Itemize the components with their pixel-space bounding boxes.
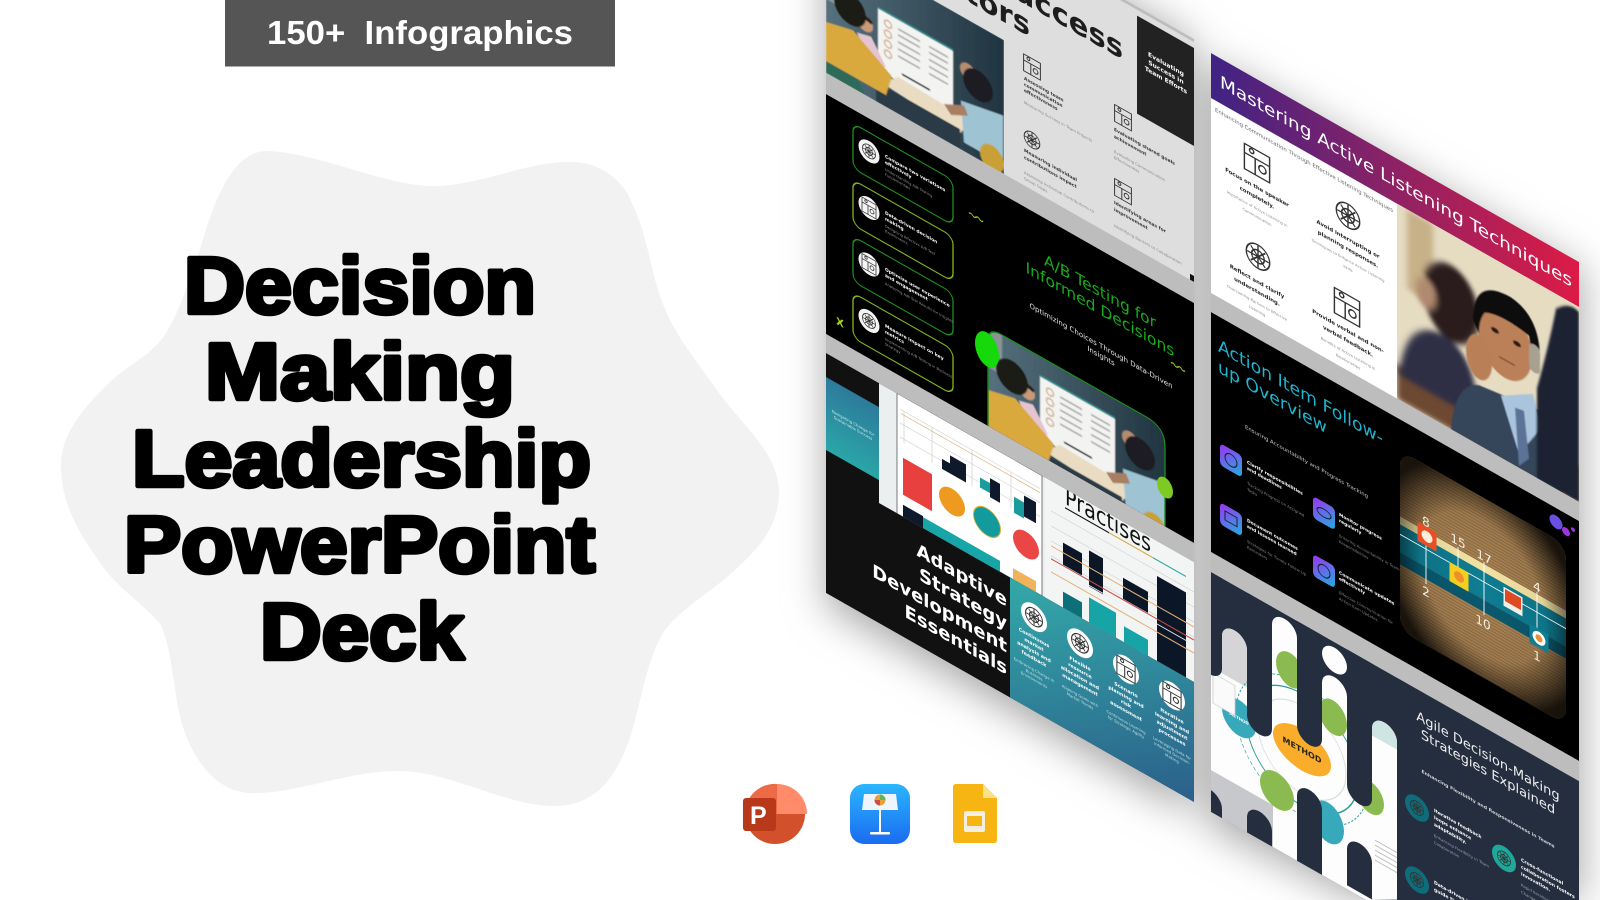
slide: agile decision-making xyxy=(1197,514,1579,900)
action item 4: Effective Communication for xyxy=(1339,590,1393,625)
step 3 xyxy=(1106,654,1146,739)
action item 3 xyxy=(1313,496,1400,578)
panel: evaluating success: Success in xyxy=(1148,59,1184,86)
step 1: analysis and xyxy=(1017,640,1051,665)
item: focus on the speaker: Importance of Active Listening in xyxy=(1227,189,1288,229)
panel: evaluating success: Evaluating xyxy=(1148,50,1184,78)
strategy 3 xyxy=(1405,861,1492,900)
subtitle: Insights xyxy=(1087,344,1115,368)
timeline image: 15 xyxy=(1450,531,1466,553)
action item 2 xyxy=(1220,502,1306,583)
step 2: Market Trends xyxy=(1067,691,1093,711)
list card 2: making xyxy=(885,216,904,233)
slide: A/B testing xyxy=(826,94,1194,562)
step 4 xyxy=(1154,680,1191,764)
title: Making xyxy=(205,327,515,416)
strategy 1: adaptability. xyxy=(1434,822,1467,846)
action item 4: Communicate updates xyxy=(1339,570,1395,607)
item: focus on the speaker: Communication xyxy=(1242,206,1272,228)
item: measuring individual contributions xyxy=(1024,130,1094,213)
method diagram in pill mask: METHOD xyxy=(1283,735,1321,767)
timeline image: 8 xyxy=(1422,514,1430,532)
step 1: feedback xyxy=(1022,649,1047,669)
practise bars xyxy=(1063,542,1186,678)
step 4: processes xyxy=(1159,727,1185,748)
title: Leadership xyxy=(132,414,591,503)
photo: team meeting xyxy=(826,0,1004,178)
list card 2: Designing Effective A/B Test xyxy=(885,223,936,257)
action item 4 xyxy=(1313,554,1395,632)
item: measuring individual contributions: Assessing Individual Contributions to xyxy=(1024,170,1094,214)
item: assessing team communication xyxy=(1024,54,1092,143)
item: identifying areas for improvement: improvement xyxy=(1114,207,1148,232)
action item 3: Responsibilities xyxy=(1339,539,1368,560)
step 3: assessment xyxy=(1110,700,1142,724)
heading: Action Item Follow- xyxy=(1218,336,1383,449)
list card 2: Experiments xyxy=(885,228,908,246)
timeline image: 1 xyxy=(1533,648,1541,666)
item: avoid interrupting: Skills xyxy=(1343,263,1353,273)
list card 1: Compare two variations xyxy=(885,154,945,194)
bottom bars xyxy=(903,505,923,528)
icon: PowerPoint xyxy=(743,784,807,844)
organic blob behind title xyxy=(61,151,779,806)
heading band: Mastering Active Listening Techniques xyxy=(1220,72,1572,292)
title: PowerPoint xyxy=(124,500,595,589)
item: assessing team communication: effectiveness xyxy=(1024,88,1058,112)
gray gutters between slides xyxy=(826,0,1579,900)
item: provide verbal xyxy=(1312,275,1384,384)
badge: 150+ Infographics xyxy=(225,0,615,66)
strategy 1: Enhancing Flexibility in Team xyxy=(1434,833,1489,869)
subtitle: Enhancing Flexibility and Responsiveness in Teams xyxy=(1422,769,1555,850)
list card 3 xyxy=(853,236,953,338)
item: evaluating shared goals xyxy=(1114,104,1175,182)
method diagram in pill mask: METHOD xyxy=(1229,711,1249,728)
list card 2: Data-driven decision xyxy=(885,210,938,246)
step 2: Flexible xyxy=(1069,656,1091,673)
step 3: for Strategic Agility xyxy=(1108,714,1145,740)
subtitle: Optimizing Choices Through Data-Driven xyxy=(1029,301,1173,391)
step 1: Continuous xyxy=(1019,627,1049,650)
practises heading: Practises xyxy=(1065,482,1151,559)
item: reflect and clarify: Reflect and clarify xyxy=(1230,264,1284,301)
subtitle: Enhancing Communication Through Effective Listening Techniques xyxy=(1215,108,1393,214)
slide: action item follow-up xyxy=(1211,312,1579,761)
action item 2: Strategies for Timely Follow-Up xyxy=(1247,539,1306,577)
list card 2 xyxy=(853,180,953,282)
action item 4: effectively xyxy=(1339,576,1365,596)
list card 3: Optimize user experience xyxy=(885,267,950,309)
strategy 1: loops enhance xyxy=(1434,815,1472,842)
item: evaluating shared goals: Effectiveness xyxy=(1114,155,1139,174)
step 3: Continuous Learning xyxy=(1106,709,1146,736)
list card 4: metrics xyxy=(885,329,904,346)
strategy 2: collaboration fosters xyxy=(1521,864,1575,900)
step 2: Aligning Goals with xyxy=(1062,683,1099,709)
icon: PowerPoint: P xyxy=(750,802,767,830)
accent ellipse lime xyxy=(1157,476,1173,498)
panel: evaluating success: Team Efforts xyxy=(1145,65,1187,96)
strategy 1: Collaboration xyxy=(1434,840,1460,859)
step 1: market xyxy=(1024,637,1044,654)
decorative purple dots xyxy=(1550,512,1575,541)
step 3: Scenario xyxy=(1114,681,1138,700)
icon: Google Slides xyxy=(953,784,997,843)
action item 2: Document outcomes xyxy=(1247,518,1298,552)
step 3: planning and xyxy=(1108,685,1144,710)
shadow behind slide columns xyxy=(826,0,1582,900)
item: measuring individual contributions: Group Goals xyxy=(1024,176,1047,194)
item: provide verbal: Benefits of Active Listening in xyxy=(1321,336,1376,372)
accent ellipse green xyxy=(975,331,999,368)
step 4: Informed Decision- xyxy=(1154,741,1190,766)
strategy 1 xyxy=(1405,789,1489,876)
item: assessing team communication: Measuring Success in Team Projects xyxy=(1024,100,1092,143)
item: evaluating shared goals: Evaluating shared goals xyxy=(1114,127,1175,167)
timeline image: 2 xyxy=(1422,584,1430,602)
action item 4: Action Item Updates xyxy=(1339,596,1378,623)
item: evaluating shared goals: achievement xyxy=(1114,134,1147,158)
item: evaluating shared goals: Evaluating Communication xyxy=(1114,149,1165,183)
side panel: teal label: Sustainable Success xyxy=(834,415,872,441)
item: reflect and clarify: Listening xyxy=(1249,304,1266,318)
method diagram in pill mask xyxy=(1211,572,1397,900)
list card 4: Implementing A/B Testing in Business xyxy=(885,336,952,379)
list card 4: Measure impact on key xyxy=(885,323,944,363)
step 4: adjustment xyxy=(1157,719,1188,742)
item: identifying areas for improvement: Identifying Barriers to Collaboration xyxy=(1114,223,1182,266)
timeline image: 4 xyxy=(1533,579,1541,597)
item: focus on the speaker: completely. xyxy=(1240,186,1274,211)
item: avoid interrupting: Techniques to Enhance Active Listening xyxy=(1311,237,1385,284)
list card 1: effectively xyxy=(885,160,912,181)
timeline image xyxy=(1400,450,1566,725)
item: measuring individual contributions: contributions impact xyxy=(1024,155,1077,191)
list card 1: Fundamentals xyxy=(885,172,910,191)
heading: adaptive strategy development essentials: Development xyxy=(872,560,1007,657)
badge: 150+ Infographics: 150+ Infographics xyxy=(267,14,573,51)
heading: adaptive strategy development essentials: Adaptive xyxy=(917,539,1007,611)
step 1: Business xyxy=(1026,668,1042,682)
step 1: Environments xyxy=(1021,670,1047,689)
item: identifying areas for improvement xyxy=(1114,178,1182,266)
action item 2: and lessons learned xyxy=(1247,524,1297,558)
strategy 2: Cross-functional xyxy=(1521,857,1563,887)
action item 1: and deadlines xyxy=(1247,466,1282,491)
heading: Informed Decisions xyxy=(1026,258,1174,361)
title xyxy=(124,241,595,676)
red square xyxy=(903,458,932,511)
action item 3: Ensuring Accountability in Team xyxy=(1339,533,1400,572)
step 4: learning and xyxy=(1155,711,1189,736)
step 2: resource xyxy=(1068,662,1092,681)
subtitle: Ensuring Accountability and Progress Tracking xyxy=(1245,425,1368,500)
item: reflect and clarify: Overcoming Barriers to Effective xyxy=(1227,283,1288,322)
side panel: teal label: Navigating Change for xyxy=(832,409,875,438)
chart images xyxy=(879,377,1194,682)
step 4: Leveraging Data for xyxy=(1153,735,1191,761)
dark bars xyxy=(942,455,966,482)
lime squiggles xyxy=(969,212,1185,372)
side panel: teal label xyxy=(826,377,879,480)
panel: teal four steps xyxy=(1010,578,1194,802)
panel: evaluating success xyxy=(1137,16,1194,146)
action item 2: Reminders xyxy=(1247,545,1267,561)
item: provide verbal: Provide verbal and non- xyxy=(1312,309,1384,355)
step 4: Iterative xyxy=(1160,707,1184,726)
list card 4: Strategy xyxy=(885,341,901,355)
item: provide verbal: verbal feedback. xyxy=(1323,325,1373,359)
item: focus on the speaker: Focus on the speaker xyxy=(1225,167,1289,209)
photo: man listening xyxy=(1397,204,1579,502)
action item 1: Tracking Progress on Assigned xyxy=(1246,480,1305,518)
item: assessing team communication: communication xyxy=(1024,82,1063,110)
strategy 1: Iterative feedback xyxy=(1434,808,1482,841)
step 2: management xyxy=(1062,672,1098,698)
item: provide verbal: Relationships xyxy=(1336,352,1360,371)
heading: adaptive strategy development essentials: Essentials xyxy=(905,600,1007,679)
list card 3: Analyzing A/B Test Results for Insights xyxy=(885,281,953,324)
step 2: allocation and xyxy=(1061,665,1099,692)
heading: A/B Testing for xyxy=(1044,250,1156,332)
list card 1: Understanding A/B Testing xyxy=(885,167,933,199)
heading: adaptive strategy development essentials: Strategy xyxy=(919,563,1007,635)
timeline image: 17 xyxy=(1476,547,1492,569)
photo: team meeting, rounded xyxy=(988,332,1165,526)
slide: adaptive strategy xyxy=(826,347,1194,802)
icon: Keynote xyxy=(850,784,910,844)
step 1 xyxy=(1014,602,1054,688)
item: reflect and clarify xyxy=(1227,227,1288,330)
item: identifying areas for improvement: Identifying areas for xyxy=(1114,200,1166,235)
action item 1: Tasks xyxy=(1246,486,1257,497)
item: avoid interrupting: Avoid interrupting or xyxy=(1317,219,1380,261)
practise underline xyxy=(1065,508,1186,576)
action item 3: regularly xyxy=(1339,518,1361,536)
step 4: Making xyxy=(1165,752,1179,765)
action item 1 xyxy=(1220,443,1305,524)
circles xyxy=(939,486,965,516)
item: focus on the speaker xyxy=(1226,142,1289,227)
step 1: Embracing Change in xyxy=(1014,656,1055,684)
timeline image: 10 xyxy=(1475,612,1491,635)
action item 3: Monitor progress xyxy=(1339,512,1382,542)
heading: up Overview xyxy=(1218,357,1327,438)
item: avoid interrupting: planning responses. xyxy=(1318,230,1378,270)
item: avoid interrupting xyxy=(1312,202,1384,283)
action item 1: Clarify responsibilities xyxy=(1247,460,1303,497)
lime x mark: X xyxy=(836,314,844,331)
item: measuring individual contributions: Measuring individual xyxy=(1024,148,1077,184)
heading: Agile Decision-Making xyxy=(1416,709,1560,805)
list card 1 xyxy=(853,123,953,225)
step 3: risk xyxy=(1121,699,1132,710)
strategy 2 xyxy=(1492,840,1575,900)
slide: mastering active listening xyxy=(1211,53,1579,502)
list card 4 xyxy=(853,293,953,395)
list card 3: and engagement xyxy=(885,273,928,303)
navy hanging strips xyxy=(1197,514,1372,900)
title: Decision xyxy=(184,241,536,330)
step 2 xyxy=(1061,628,1099,710)
title: Deck xyxy=(260,587,465,676)
item: reflect and clarify: understanding. xyxy=(1234,276,1280,308)
slide: evaluating success factors xyxy=(826,0,1194,286)
heading: Strategies Explained xyxy=(1421,727,1555,818)
strategy 2: innovation. xyxy=(1521,871,1550,894)
item: assessing team communication: Assessing team xyxy=(1024,76,1064,104)
